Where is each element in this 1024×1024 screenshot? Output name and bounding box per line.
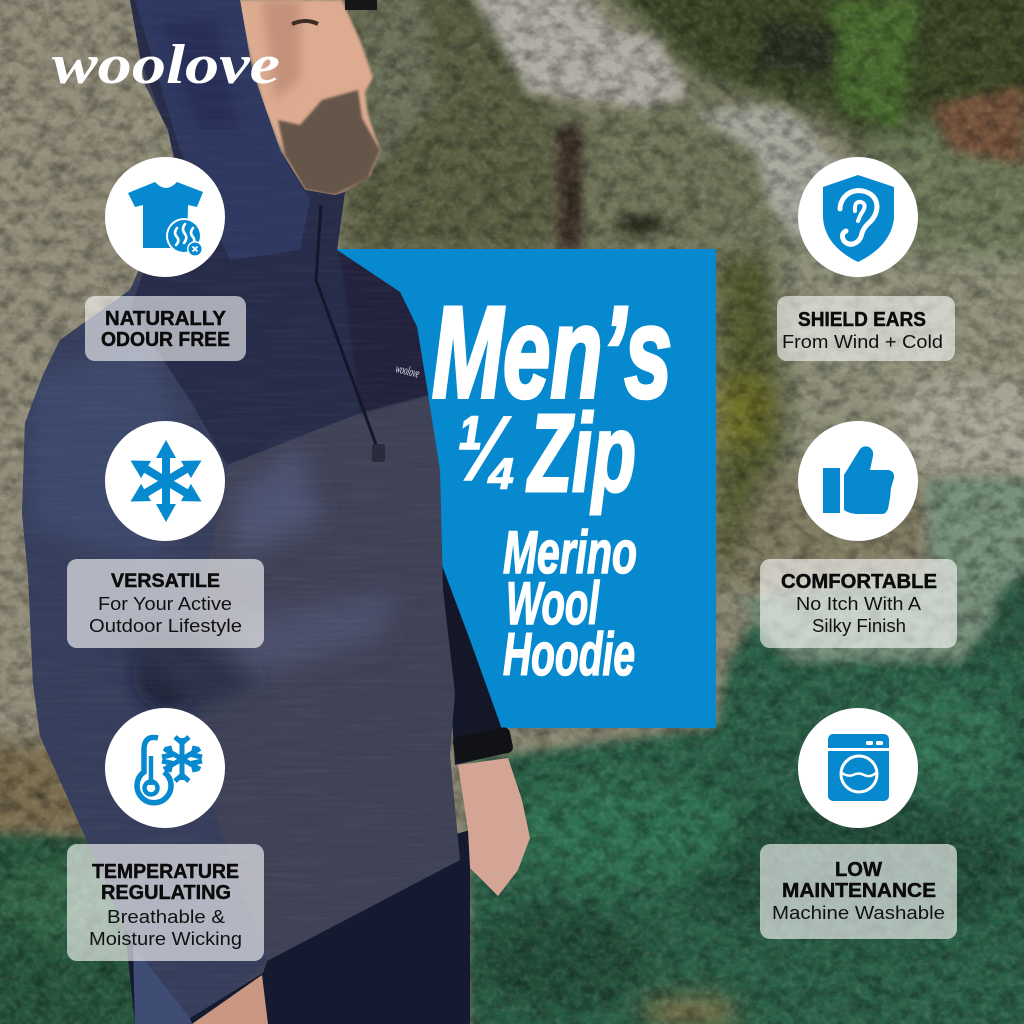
feature: comfortable — [760, 421, 957, 648]
label card: MAINTENANCE — [782, 880, 936, 902]
label card: ODOUR FREE — [101, 329, 230, 351]
logo: woolove: woolove — [52, 34, 280, 96]
label card — [760, 559, 957, 648]
hand and watch — [192, 726, 530, 1024]
label card: From Wind + Cold — [782, 332, 943, 352]
label card — [777, 296, 955, 361]
label card: VERSATILE — [111, 571, 220, 592]
title text — [432, 279, 672, 688]
label card — [85, 296, 246, 361]
label card: Silky Finish — [812, 616, 906, 636]
hoodie body — [0, 0, 480, 1024]
icon: t-shirt with odour cross — [105, 157, 225, 277]
label card: No Itch With A — [796, 594, 921, 614]
label card: For Your Active — [98, 594, 232, 614]
title: Zip: Zip — [526, 392, 636, 515]
label card: TEMPERATURE — [92, 861, 239, 883]
label card: Outdoor Lifestyle — [89, 616, 242, 636]
blue title panel — [336, 249, 716, 728]
subtitle: Merino Wool Hoodie: Wool — [506, 570, 600, 637]
label card: COMFORTABLE — [781, 571, 937, 593]
subtitle: Merino Wool Hoodie: Merino — [503, 519, 637, 586]
feature: shield ears — [777, 157, 955, 361]
label card: REGULATING — [101, 882, 231, 904]
subtitle: Merino Wool Hoodie: Hoodie — [503, 621, 635, 688]
label card: NATURALLY — [105, 308, 227, 330]
icon: washing machine — [798, 708, 918, 828]
icon: snowflake arrows — [105, 421, 225, 541]
label card — [67, 844, 264, 961]
feature: versatile — [67, 421, 264, 648]
subtitle: Merino Wool Hoodie — [503, 519, 637, 688]
label card — [67, 559, 264, 648]
face and beard — [236, 0, 380, 197]
icon: shield with ear — [798, 157, 918, 277]
feature: naturally odour free — [85, 157, 246, 361]
title: fraction: ¼ — [456, 398, 518, 500]
trousers — [125, 830, 470, 1024]
feature: low maintenance — [760, 708, 957, 939]
far sleeve — [440, 560, 510, 765]
label card: Machine Washable — [772, 903, 945, 923]
feature: temperature regulating — [67, 708, 264, 961]
chest logo: woolove — [394, 360, 421, 381]
label card — [760, 844, 957, 939]
water — [0, 480, 1024, 1024]
label card: SHIELD EARS — [798, 309, 926, 331]
title: Men's: Men’s — [432, 279, 672, 425]
label card: Breathable & — [107, 907, 225, 927]
icon: thermometer and snowflake — [105, 708, 225, 828]
person wearing hoodie — [0, 0, 530, 1024]
zipper — [316, 205, 378, 450]
label card: Moisture Wicking — [89, 929, 242, 949]
icon: thumbs up — [798, 421, 918, 541]
label card: LOW — [835, 859, 882, 881]
